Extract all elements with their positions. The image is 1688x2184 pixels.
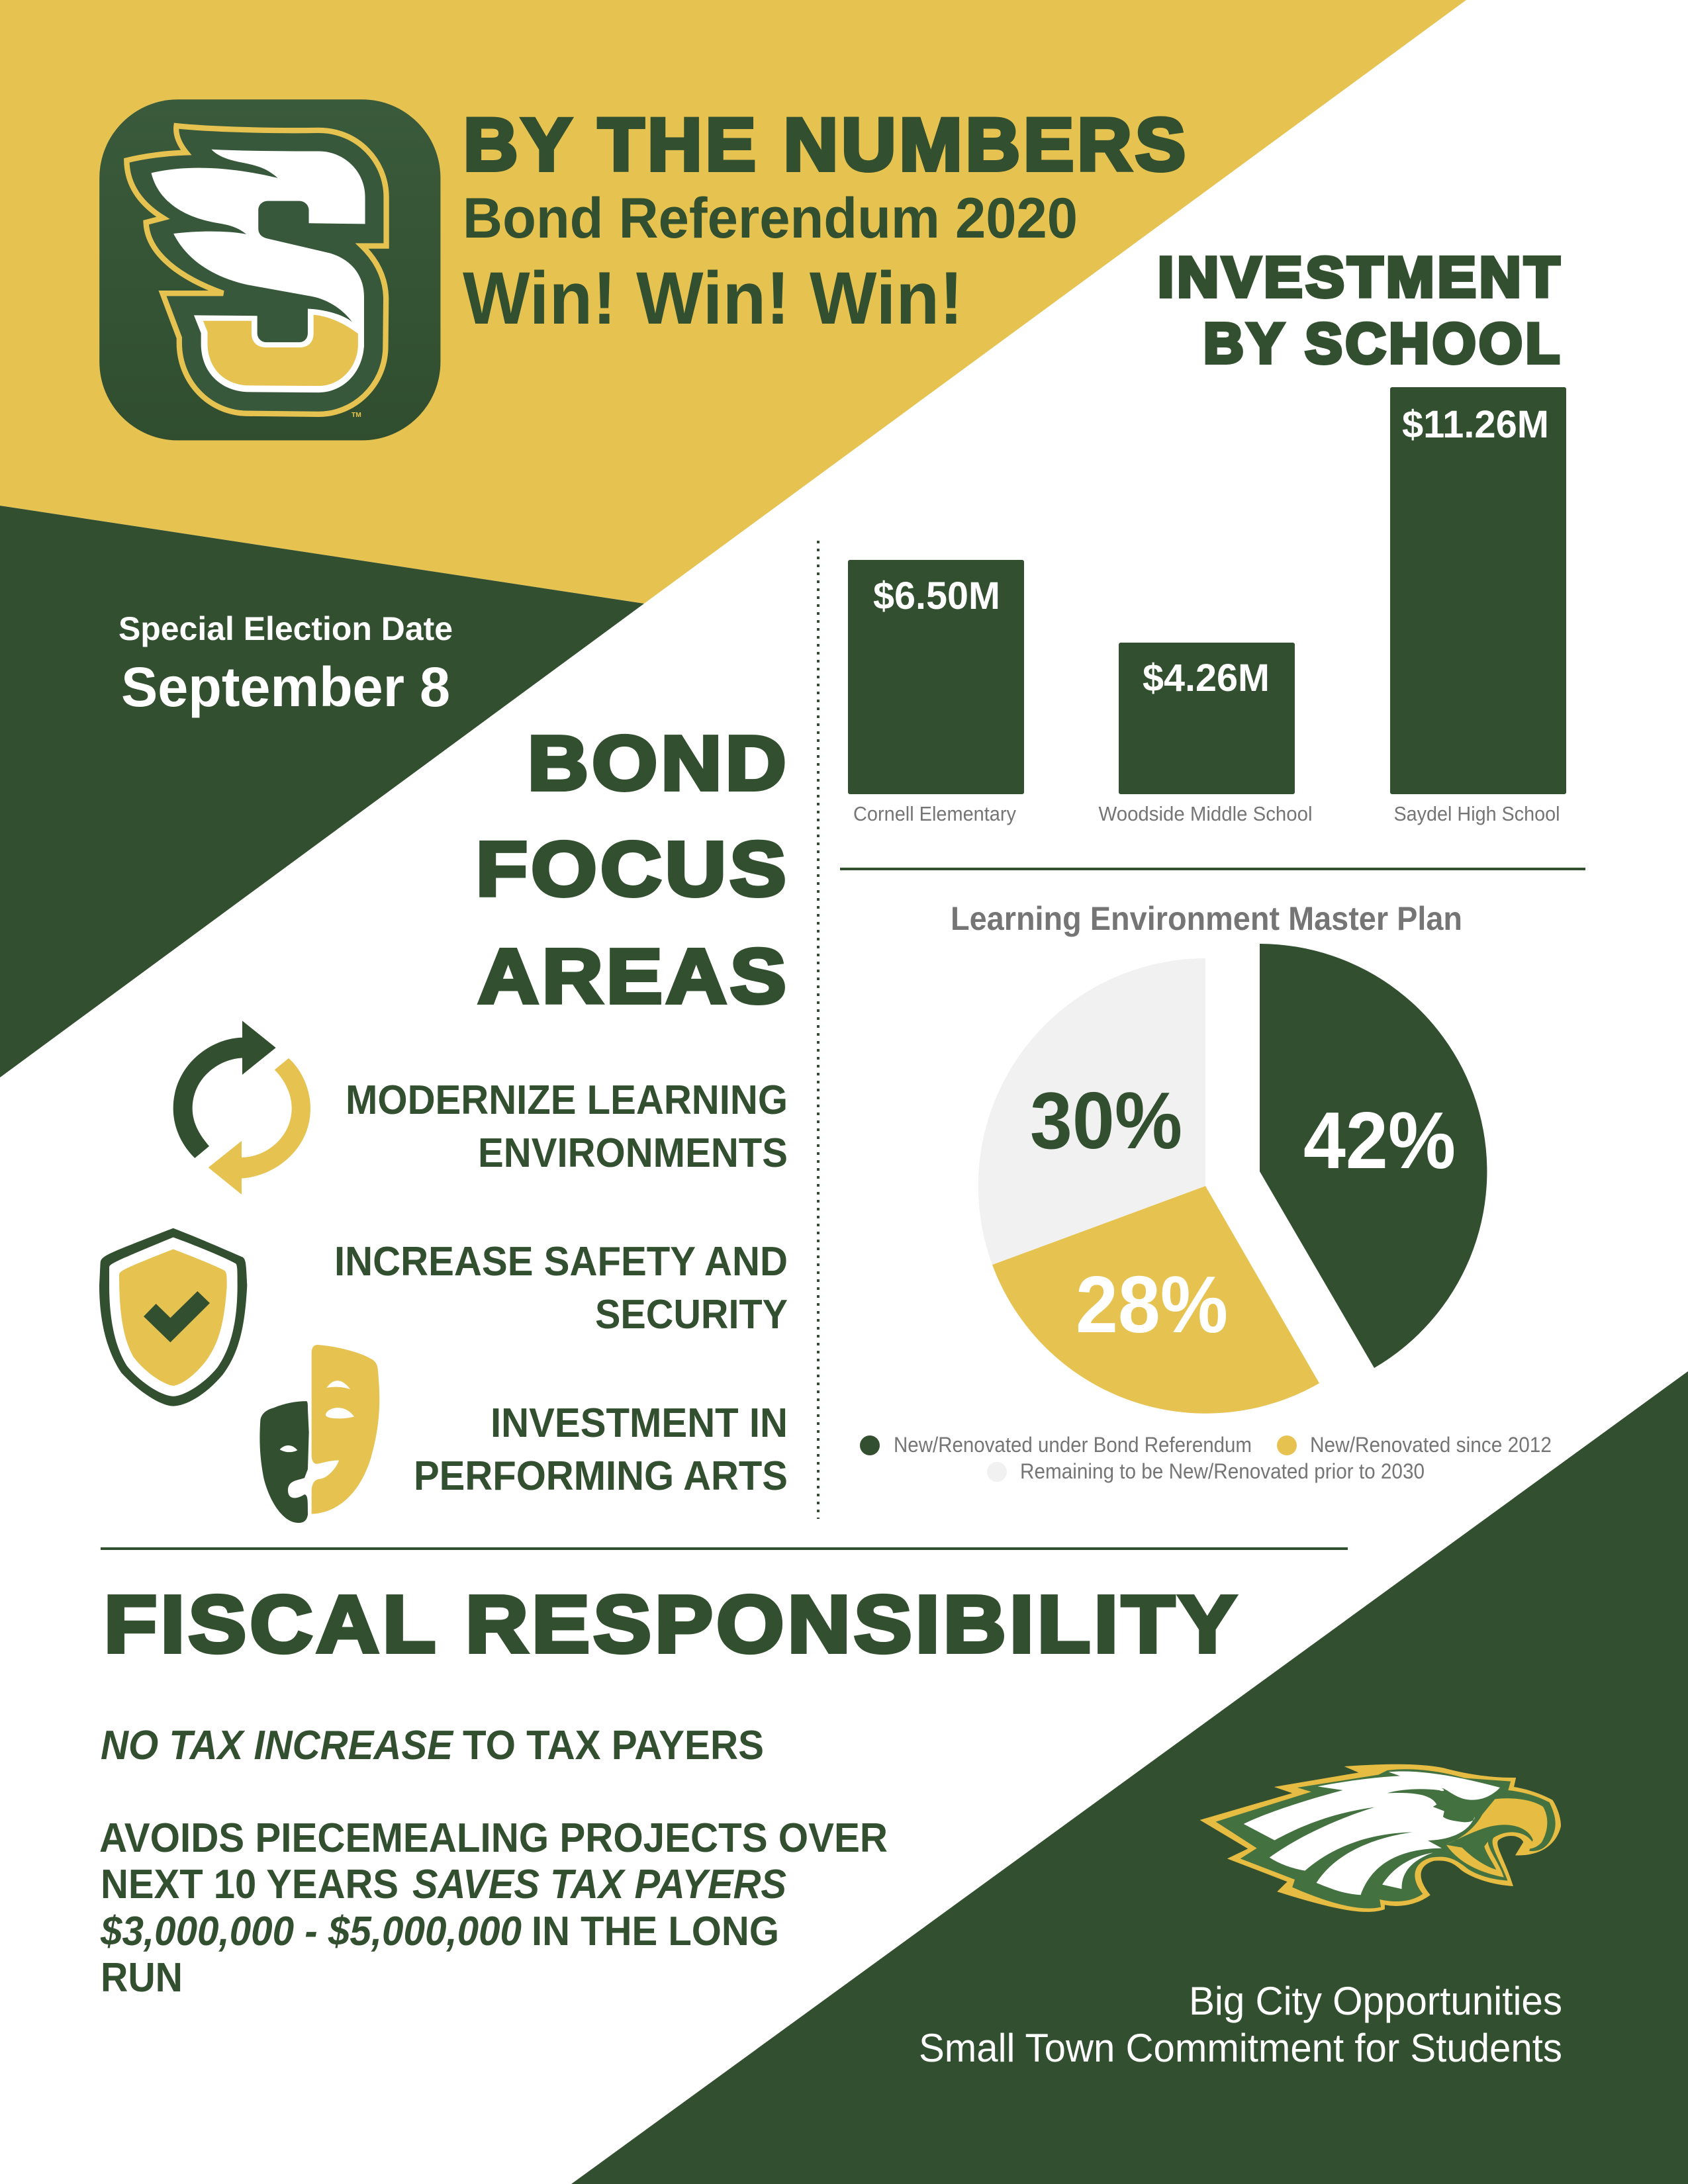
text: investment in performing arts (414, 1400, 788, 1499)
legend: New/Renovated under Bond Referendum (894, 1433, 1252, 1457)
text: modernize learning environments (346, 1077, 788, 1176)
logo: school S app icon: TM (352, 412, 361, 419)
bar: Woodside Middle School (1099, 643, 1312, 825)
title: by the numbers: BY THE NUMBERS (463, 103, 1189, 186)
green bottom right background (571, 1371, 1688, 2184)
slice: 28 percent: 28% (1076, 1259, 1228, 1349)
slice: 30 percent (978, 958, 1205, 1265)
logo: eagle mascot (1200, 1764, 1561, 1912)
text: avoids piecemealing projects: AVOIDS PIECEMEALING PROJECTS OVER (99, 1815, 888, 1861)
bar: Saydel High School: $11.26M (1402, 403, 1549, 446)
bar: Cornell Elementary (848, 560, 1024, 825)
tagline: win win win: Win! Win! Win! (463, 257, 963, 340)
heading: investment by school: INVESTMENT (1158, 246, 1563, 309)
bar chart: investment by school (848, 387, 1566, 825)
gold corner background (0, 0, 1466, 604)
slice: 28 percent (992, 1186, 1319, 1414)
election date callout (118, 610, 453, 718)
tagline: big city opportunities: Big City Opportunities (1189, 1979, 1562, 2023)
text: avoids piecemealing projects: RUN (101, 1955, 183, 2001)
heading: bond focus areas: BOND (528, 720, 790, 806)
election date callout: Special Election Date (118, 610, 453, 647)
chart title: learning environment master plan: Learning Environment Master Plan (951, 900, 1462, 937)
tagline: big city opportunities: Small Town Commitment for Students (919, 2026, 1562, 2070)
text: increase safety and security (334, 1239, 788, 1338)
text: investment in performing arts: INVESTMENT IN (491, 1400, 788, 1446)
text: investment in performing arts: PERFORMING ARTS (414, 1453, 788, 1499)
bar: Cornell Elementary: $6.50M (873, 574, 1000, 617)
election date callout: September 8 (121, 656, 450, 718)
heading: investment by school (1158, 246, 1563, 375)
icon: recycle arrows (173, 1021, 310, 1195)
heading: investment by school: BY SCHOOL (1203, 312, 1563, 375)
text: modernize learning environments: ENVIRONMENTS (478, 1130, 788, 1176)
logo: school S app icon (99, 99, 440, 440)
text: avoids piecemealing projects: SAVES TAX PAYERS (412, 1862, 786, 1907)
green triangle background (0, 506, 644, 1077)
text: no tax increase: TO TAX PAYERS (463, 1723, 764, 1768)
legend: Remaining to be New/Renovated prior to 2030 (1020, 1459, 1425, 1483)
text: avoids piecemealing projects: $3,000,000 - $5,000,000 (100, 1909, 522, 1954)
bar: Saydel High School: Saydel High School (1394, 802, 1560, 825)
tagline: big city opportunities (919, 1979, 1562, 2070)
bar: Saydel High School (1390, 387, 1566, 825)
heading: bond focus areas: FOCUS (476, 826, 790, 912)
bar: Woodside Middle School: Woodside Middle School (1099, 802, 1312, 825)
text: no tax increase (101, 1723, 764, 1768)
heading: bond focus areas: AREAS (478, 933, 790, 1019)
text: avoids piecemealing projects: NEXT 10 YEARS (101, 1862, 399, 1907)
text: avoids piecemealing projects: IN THE LONG (532, 1909, 779, 1954)
text: increase safety and security: INCREASE SAFETY AND (334, 1239, 788, 1285)
bar: Cornell Elementary: Cornell Elementary (853, 802, 1016, 825)
subtitle: bond referendum: Bond Referendum 2020 (463, 187, 1078, 250)
heading: bond focus areas (476, 720, 790, 1019)
icon: theatre masks (259, 1345, 379, 1523)
legend: New/Renovated since 2012 (1310, 1433, 1552, 1457)
text: avoids piecemealing projects (99, 1815, 888, 2001)
slice: 30 percent: 30% (1030, 1075, 1182, 1165)
slice: 42 percent (1260, 944, 1487, 1368)
legend (860, 1433, 1552, 1483)
pie chart (978, 944, 1487, 1414)
slice: 42 percent: 42% (1303, 1095, 1456, 1185)
text: modernize learning environments: MODERNIZE LEARNING (346, 1077, 788, 1123)
bar: Woodside Middle School: $4.26M (1143, 657, 1270, 700)
text: no tax increase: NO TAX INCREASE (101, 1723, 454, 1768)
text: increase safety and security: SECURITY (595, 1292, 788, 1338)
icon: shield with check (99, 1228, 247, 1406)
heading: fiscal responsibility: FISCAL RESPONSIBILITY (104, 1579, 1240, 1669)
